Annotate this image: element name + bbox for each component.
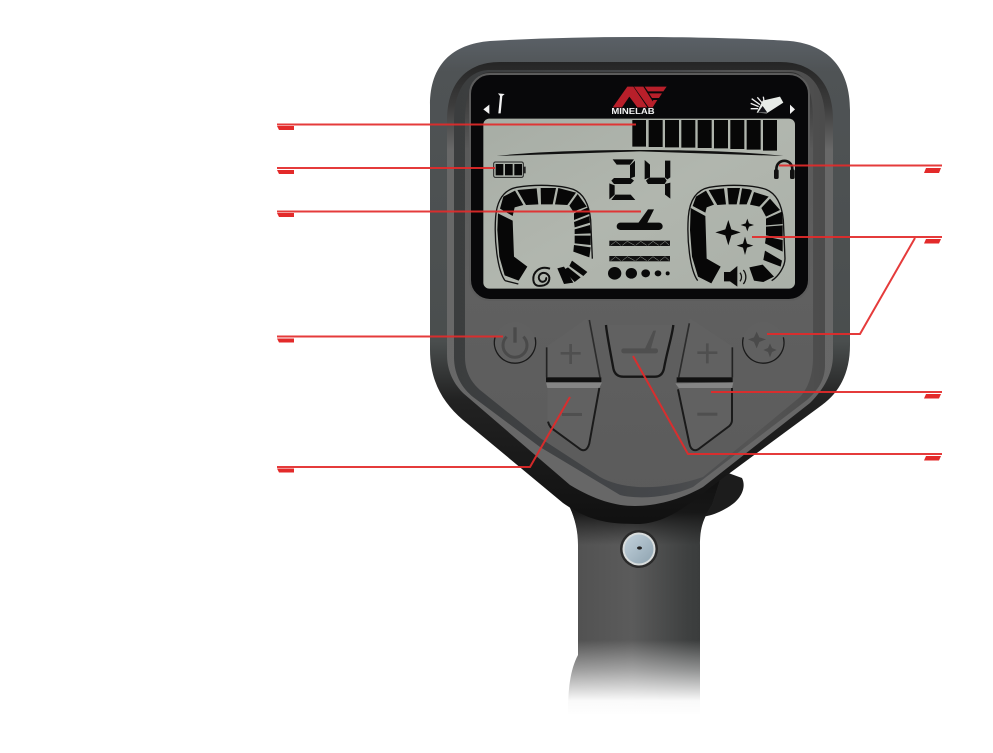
display panel: all coordinates in 3x crop space [483,87,795,289]
icon: battery [494,162,526,177]
sensitivity hatch bars [609,241,670,261]
icon: search mode coil [617,209,663,230]
button: search mode [606,325,673,377]
number readout: 24 [609,159,670,200]
callout lines [277,124,942,467]
button: left minus [546,377,602,450]
left callout tags [277,126,294,472]
callout: depth bars [277,124,636,126]
lcd screen [483,119,795,289]
icon: ground balance swirl [533,268,550,286]
callout: search mode icon [277,210,641,212]
icon: nail target [483,93,505,114]
callout: volume gauge button [711,391,942,393]
callout: battery [277,167,495,169]
button: power [494,322,536,363]
logo: Minelab [611,87,667,116]
face band [454,70,825,497]
button: right minus [675,377,733,450]
callout: power button [277,336,503,338]
shell rim [447,62,833,506]
callout: search mode button [633,356,942,454]
device shell [430,37,850,524]
gauge: right [688,185,785,283]
button: sparkle mode [743,322,784,363]
gauge: left [495,185,592,284]
callout: sparkle mode [752,237,942,334]
control buttons: coordinates in 3x crop space [494,318,784,450]
logo: Minelab: MINELAB [611,106,655,116]
target size dots [608,267,670,280]
display bezel [470,74,809,300]
icon: sparkles [715,219,754,255]
right callout tags [924,168,941,460]
button: right plus [677,318,733,377]
icon: headphones [774,161,795,179]
handle neck [560,470,744,716]
mounting screw [620,530,658,568]
curved divider [497,150,783,156]
icon: gold nugget target [751,97,795,114]
callout: headphones [779,164,942,166]
icon: speaker [724,266,746,287]
button face [465,72,813,487]
callout: minus button [277,397,570,467]
depth indicator bars [632,120,777,151]
button: left plus [547,318,600,377]
